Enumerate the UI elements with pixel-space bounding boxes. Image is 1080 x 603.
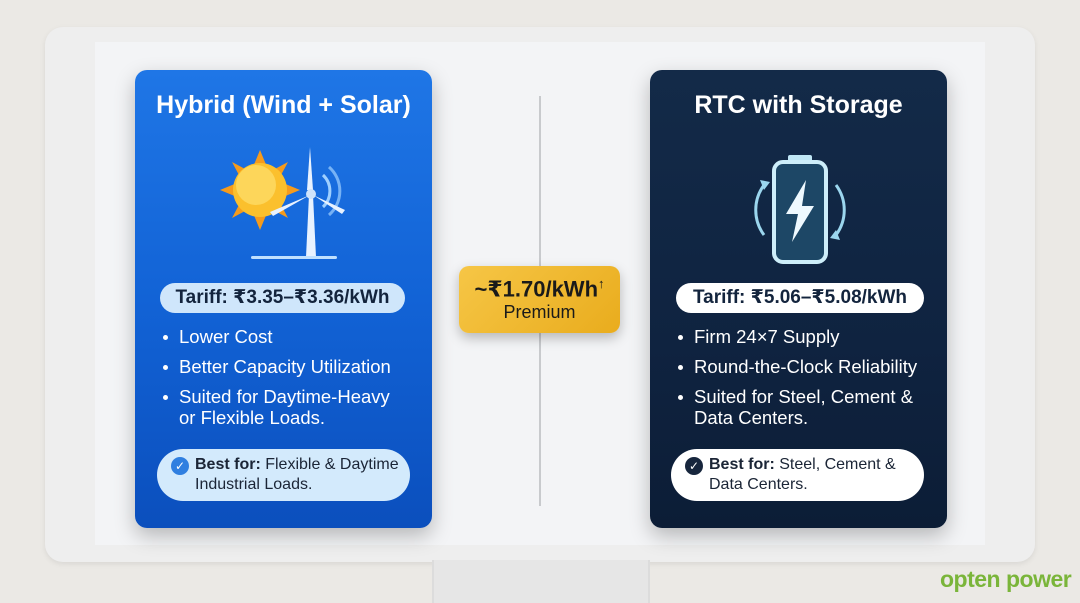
premium badge: ~₹1.70/kWh↑ [474, 276, 605, 301]
panel: RTC [650, 70, 947, 528]
bullet list: hybrid: Lower Cost [179, 326, 273, 347]
best for: RTC: Best for: Steel, Cement & [709, 456, 896, 473]
heading: RTC: RTC with Storage [694, 91, 903, 119]
tariff pill: hybrid [160, 283, 405, 313]
bullet list: RTC: Firm 24×7 Supply [694, 326, 840, 347]
bullet list: hybrid: Suited for Daytime-Heavy [179, 386, 390, 407]
premium badge: Premium [503, 302, 576, 322]
screen [95, 42, 985, 545]
bullet list: RTC [678, 326, 918, 428]
icon: sun and wind turbine [220, 148, 345, 259]
monitor stand [432, 560, 650, 603]
tariff pill: RTC [676, 283, 924, 313]
bullet list: RTC: Suited for Steel, Cement & [694, 386, 913, 407]
best for: hybrid: Industrial Loads. [195, 476, 312, 493]
best for: hybrid [157, 449, 410, 501]
heading: hybrid: Hybrid (Wind + Solar) [156, 91, 411, 119]
bullet list: hybrid: or Flexible Loads. [179, 407, 325, 428]
bullet list: RTC: Data Centers. [694, 407, 808, 428]
tariff pill: RTC: Tariff: ₹5.06–₹5.08/kWh [693, 287, 907, 308]
logo: opten power: opten power [940, 566, 1071, 592]
icon: battery with bolt [754, 155, 846, 264]
best for: RTC: ✓ [689, 459, 699, 473]
best for: hybrid: Best for: Flexible & Daytime [195, 456, 399, 473]
bullet list: RTC: Round-the-Clock Reliability [694, 356, 917, 377]
bullet list: hybrid: Better Capacity Utilization [179, 356, 391, 377]
best for: hybrid: ✓ [175, 459, 185, 473]
premium badge [459, 266, 620, 333]
tariff pill: hybrid: Tariff: ₹3.35–₹3.36/kWh [175, 287, 390, 308]
best for: RTC [671, 449, 924, 501]
panel: hybrid [135, 70, 432, 528]
best for: RTC: Data Centers. [709, 476, 808, 493]
bullet list: hybrid [163, 326, 391, 428]
center divider [539, 96, 541, 506]
